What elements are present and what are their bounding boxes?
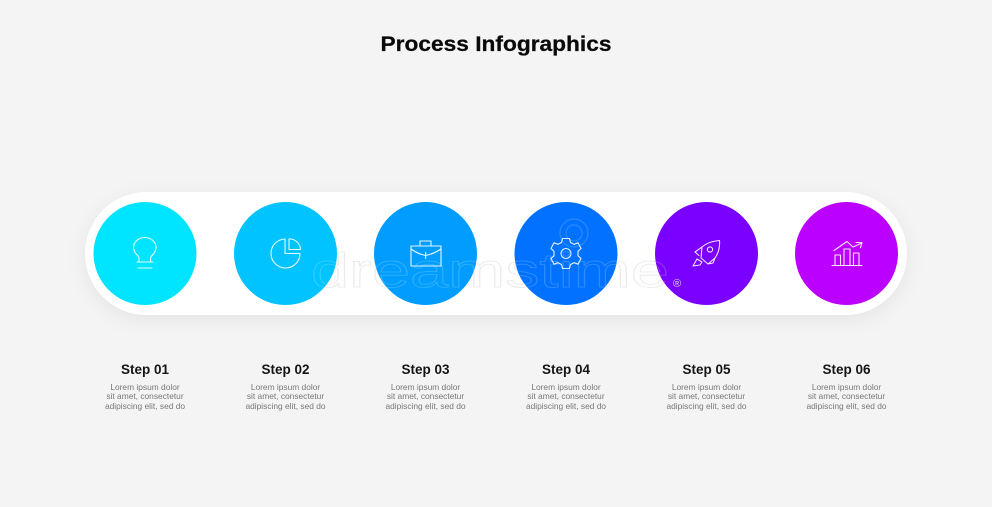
step 02 label: adipiscing elit, sed do [245,401,326,411]
step 02 label: Lorem ipsum dolor [251,382,320,392]
step 03 label: sit amet, consectetur [387,391,464,401]
step 01 label [105,362,185,411]
step 03 label [385,362,466,411]
title: Process Infographics [380,32,612,56]
step 04 label: adipiscing elit, sed do [526,401,606,411]
step 03 label: Lorem ipsum dolor [391,382,460,392]
icon: growth chart [832,242,862,266]
step 05 label: sit amet, consectetur [668,391,745,401]
step 02 label: sit amet, consectetur [247,391,324,401]
watermark on white: dreamstime [311,245,669,298]
step 02 label: Step 02 [261,362,310,377]
icon: briefcase [411,241,441,266]
step 05 label [666,362,747,411]
panel: white pill track [85,192,907,315]
step 5 circle [655,202,758,305]
step 06 label: adipiscing elit, sed do [806,401,887,411]
watermark over circles: ® [673,278,681,290]
icon: light bulb [134,237,156,268]
step 04 label: sit amet, consectetur [527,391,605,401]
icon: gear [551,238,581,268]
icon: rocket [693,240,720,266]
step 01 label: sit amet, consectetur [106,391,184,401]
step 06 label: Step 06 [822,362,871,377]
step 01 label: adipiscing elit, sed do [105,401,185,411]
step 04 label: Step 04 [542,362,590,377]
step 02 label [245,362,326,411]
step 4 circle [514,202,618,305]
step 01 label: Step 01 [121,362,169,377]
step 04 label: Lorem ipsum dolor [531,382,601,392]
step 03 label: adipiscing elit, sed do [385,401,466,411]
step 1 circle [94,202,196,305]
watermark over circles [311,219,681,298]
step 6 circle [795,202,898,305]
step 3 circle [374,202,477,305]
icon: pie chart [271,239,300,268]
watermark over circles: dreamstime [311,245,669,298]
step 06 label [806,362,887,411]
step 05 label: Step 05 [682,362,731,377]
step 06 label: Lorem ipsum dolor [812,382,881,392]
step 06 label: sit amet, consectetur [808,391,885,401]
step 03 label: Step 03 [401,362,450,377]
step 01 label: Lorem ipsum dolor [110,382,180,392]
step 2 circle [234,202,337,305]
step 05 label: Lorem ipsum dolor [672,382,741,392]
step 04 label [526,362,606,411]
step 05 label: adipiscing elit, sed do [666,401,747,411]
